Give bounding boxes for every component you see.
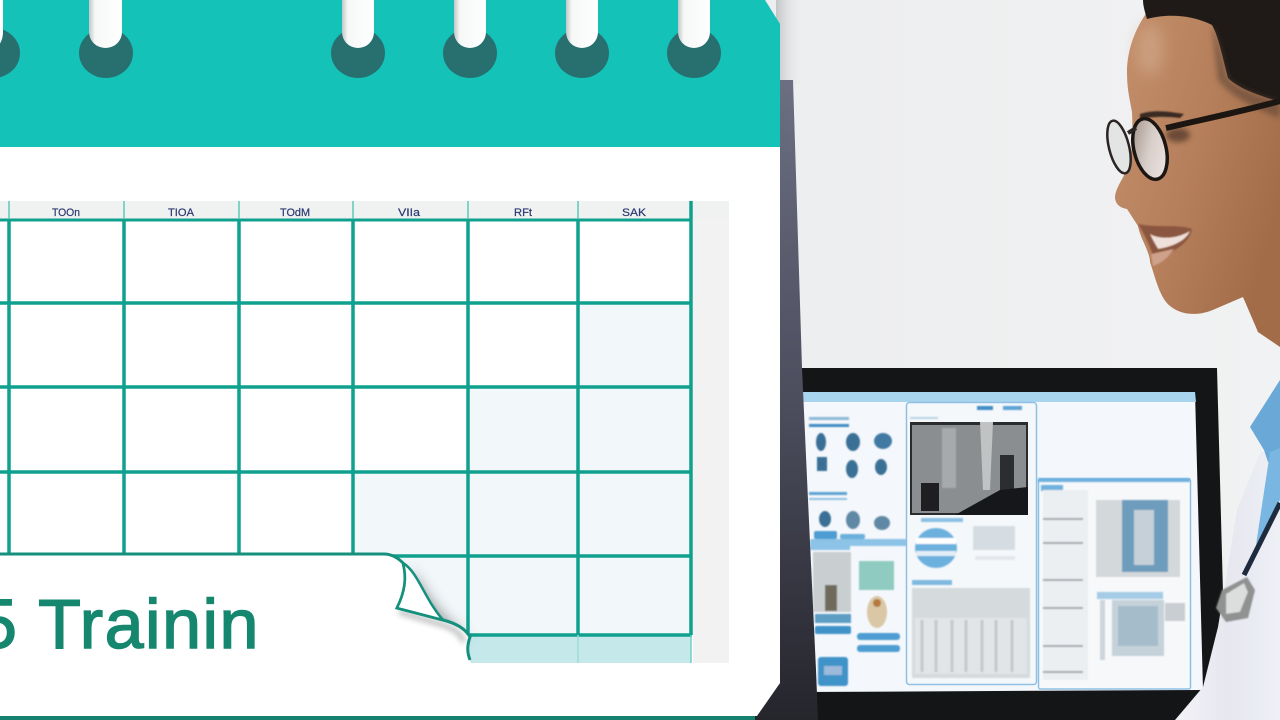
centre panel	[906, 402, 1036, 684]
ring: 3	[331, 0, 385, 78]
page curl shadow	[405, 570, 470, 638]
tab outline	[0, 554, 470, 660]
video still on screen	[910, 422, 1028, 515]
calendar bottom edge	[0, 716, 755, 720]
calendar	[0, 0, 780, 720]
curled flap	[397, 563, 443, 620]
monitor post	[750, 80, 818, 720]
weekday header band	[0, 201, 729, 219]
weekday labels: SAK	[622, 207, 647, 219]
weekday labels: RFt	[514, 207, 532, 219]
hair fade	[1212, 25, 1280, 118]
neck	[1240, 240, 1280, 347]
bottom tinted row	[468, 635, 691, 663]
weekday labels: TOdM	[280, 207, 310, 219]
right margin band	[693, 201, 729, 663]
calendar page	[0, 140, 780, 716]
left column icons	[809, 417, 909, 686]
calendar grid	[0, 201, 729, 663]
forehead highlight	[1136, 24, 1164, 76]
weekday labels: TOOn	[52, 207, 80, 219]
binding rings	[0, 0, 721, 78]
centre panel widgets	[912, 518, 1030, 678]
screen top bar	[803, 392, 1196, 402]
mouth and teeth	[1138, 224, 1192, 266]
ring: 1	[0, 0, 20, 78]
right panel	[1038, 479, 1190, 689]
title tab with curled corner	[0, 553, 471, 716]
shirt front	[1256, 448, 1280, 545]
eyebrow	[1140, 111, 1184, 119]
weekday labels: VIIa	[398, 207, 421, 219]
tab lower shadow	[399, 612, 464, 642]
shaded cells	[353, 303, 691, 635]
shirt collar	[1250, 380, 1280, 462]
person	[1103, 0, 1280, 720]
glasses	[1103, 101, 1280, 183]
grid lines	[0, 201, 692, 663]
ring: 4	[443, 0, 497, 78]
ring: 2	[79, 0, 133, 78]
ring: 6	[667, 0, 721, 78]
calendar cast shadow on wall	[776, 0, 804, 84]
monitor	[802, 368, 1226, 720]
weekday labels	[52, 207, 647, 219]
eye shadow	[1166, 128, 1190, 142]
weekday labels: TIOA	[168, 207, 195, 219]
lab coat	[1175, 447, 1280, 720]
tab body	[0, 553, 471, 716]
stethoscope	[1216, 503, 1280, 622]
right panel content	[1038, 478, 1190, 680]
monitor frame	[802, 368, 1226, 720]
ring: 5	[555, 0, 609, 78]
hair	[1143, 0, 1280, 102]
calendar header band	[0, 0, 780, 147]
table columns on screen	[922, 620, 1012, 672]
face	[1115, 0, 1280, 345]
monitor screen	[803, 392, 1203, 692]
centre panel buttons	[910, 406, 1022, 419]
